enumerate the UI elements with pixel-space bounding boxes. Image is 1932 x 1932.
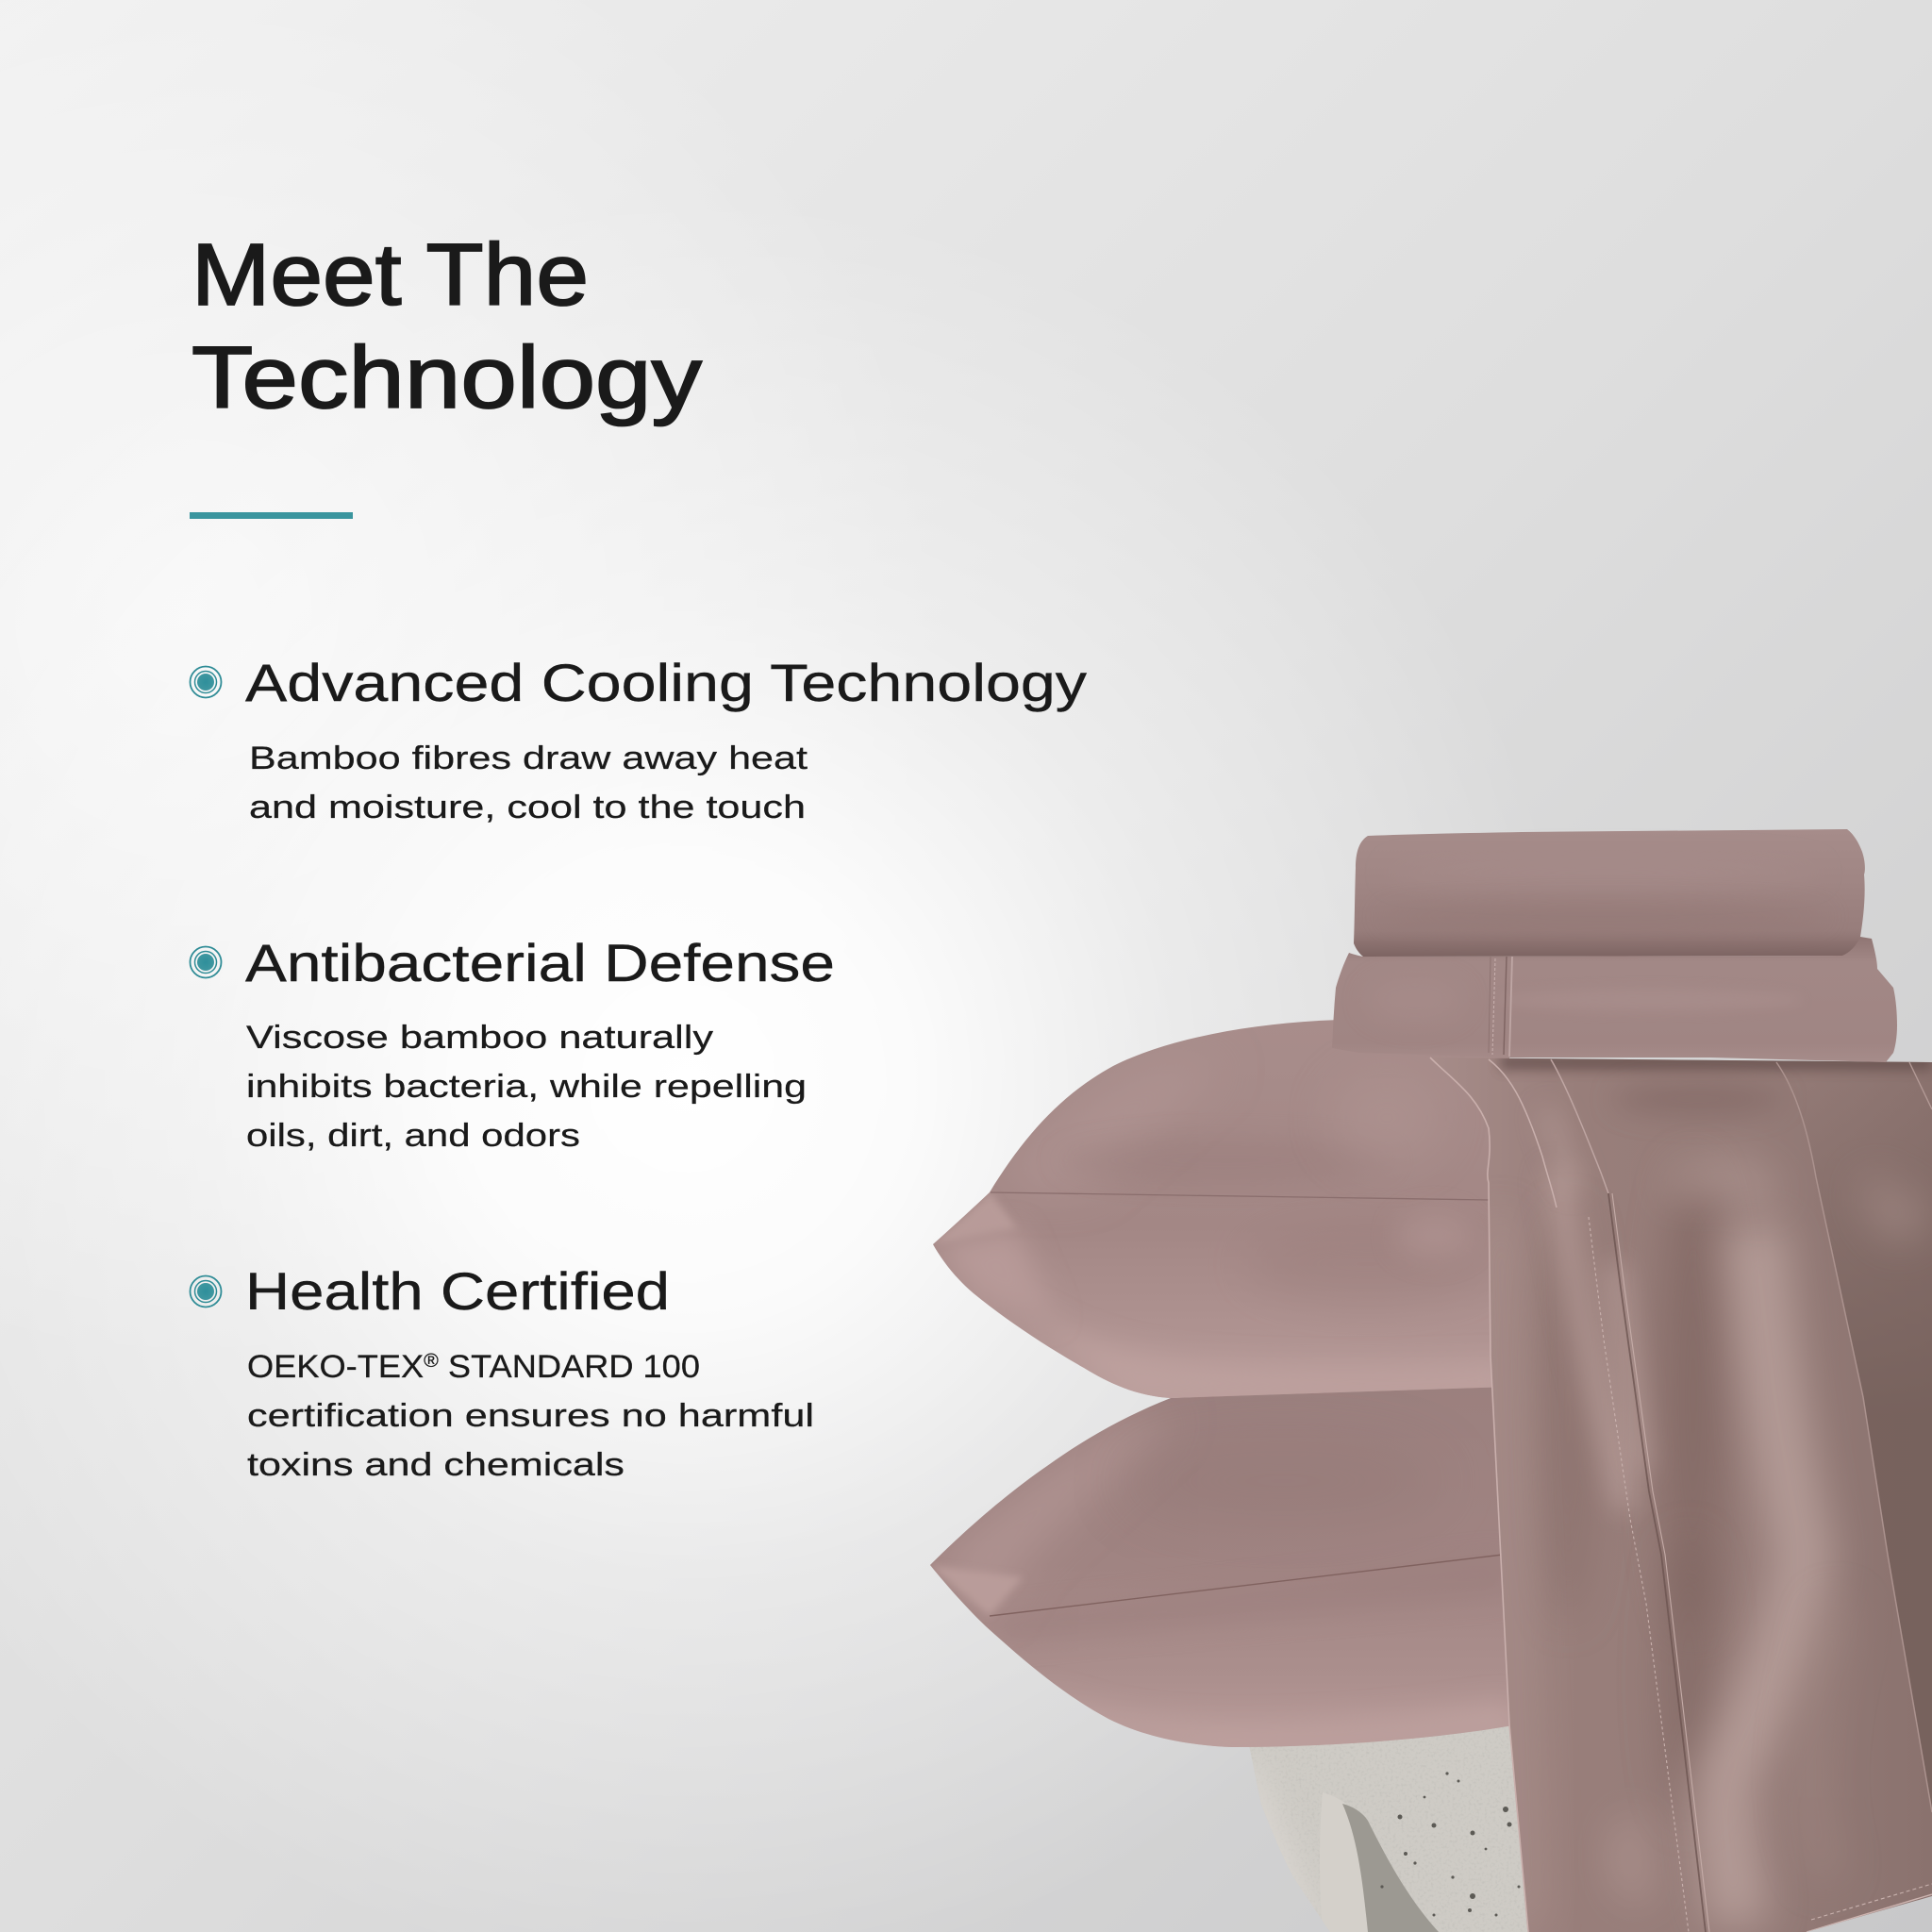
description [247,1349,814,1483]
icon: concentric target [191,947,221,977]
stone pedestal [1249,1726,1527,1932]
heading: Antibacterial Defense [245,933,835,992]
title: Meet The [192,225,589,324]
pillow: lower [930,1382,1519,1755]
pillow: upper [933,1020,1509,1406]
folded sheet: upper [1354,829,1865,957]
heading: Advanced Cooling Technology [245,653,1087,712]
feature: health certified [191,1261,814,1483]
description: Viscose bamboo naturally [246,1020,713,1056]
folded sheet: lower [1332,937,1897,1062]
description: inhibits bacteria, while repelling [246,1069,807,1105]
title accent bar [190,512,353,519]
shadow under the folded stack [1500,1055,1932,1070]
icon: concentric target [191,666,221,698]
description: STANDARD 100 [439,1349,700,1385]
description: OEKO-TEX [247,1349,413,1385]
icon: concentric target [191,1275,221,1307]
pillow seam [990,1555,1503,1616]
description: Bamboo fibres draw away heat [249,741,808,776]
feature: advanced cooling [191,653,1087,825]
description: and moisture, cool to the touch [249,790,806,825]
description: oils, dirt, and odors [246,1118,580,1154]
description [249,741,808,825]
title [192,225,703,426]
satin highlights [1724,1226,1804,1924]
fold stitching [1489,957,1512,1057]
description: toxins and chemicals [247,1447,625,1483]
pillow seam [991,1192,1489,1200]
description: certification ensures no harmful [247,1398,814,1434]
title: Technology [192,328,703,426]
dark folds [1820,1191,1932,1807]
description [246,1020,807,1154]
sheet edge piping [1430,1058,1528,1932]
hem and fold lines [1489,1059,1557,1208]
heading: Health Certified [245,1261,670,1321]
feature: antibacterial defense [191,933,835,1154]
description: ® [424,1351,439,1372]
product: bedding stack on stone [930,829,1932,1932]
draped flat sheet [1430,1055,1932,1932]
